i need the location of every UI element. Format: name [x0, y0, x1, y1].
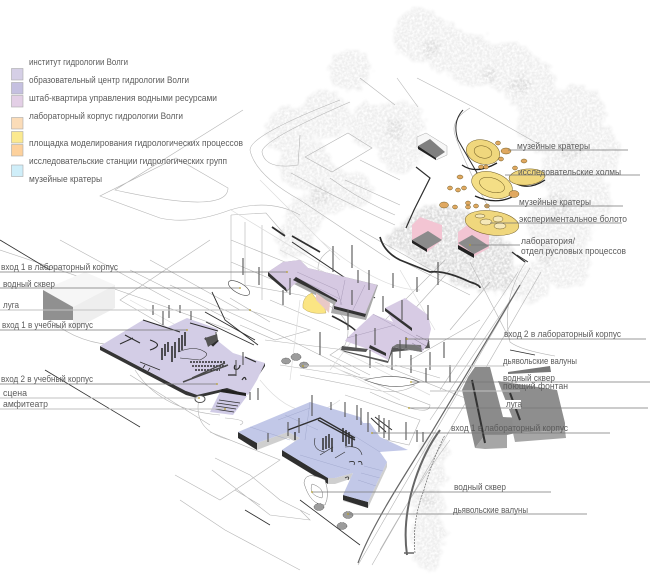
callouts right: поющий фонтан: [503, 381, 568, 391]
callouts right: вход 1 в лабораторный корпус: [451, 423, 568, 433]
leader lines: [0, 150, 650, 514]
site linework: [0, 78, 555, 570]
legend labels: музейные кратеры: [29, 174, 102, 184]
legend labels: образовательный центр гидрологии Волги: [29, 75, 189, 85]
legend labels: лабораторный корпус гидрологии Волги: [29, 111, 183, 121]
callouts right: отдел русловых процессов: [521, 246, 626, 256]
callouts right: луга: [506, 399, 522, 409]
grey tree mass behind labs: [382, 205, 515, 292]
callouts right: водный сквер: [503, 373, 555, 383]
callouts left: вход 1 в лабораторный корпус: [1, 262, 118, 272]
callouts left: [1, 262, 118, 409]
callouts right: исследовательские холмы: [518, 167, 621, 177]
callouts left: вход 2 в учебный корпус: [1, 374, 93, 384]
callouts right: лаборатория/: [521, 236, 575, 246]
callouts left: луга: [3, 300, 19, 310]
callouts right: дьявольские валуны: [503, 356, 577, 366]
legend labels: исследовательские станции гидрологических групп: [29, 156, 227, 166]
museum craters and hills: [440, 136, 546, 239]
north service block: [417, 133, 447, 160]
long curved promenade: [358, 285, 520, 563]
callouts right: вход 2 в лабораторный корпус: [504, 329, 621, 339]
callouts right: музейные кратеры: [517, 141, 590, 151]
callouts left: вход 1 в учебный корпус: [2, 320, 93, 330]
callouts right: экспериментальное болото: [519, 214, 627, 224]
callouts left: сцена: [3, 388, 27, 398]
legend labels: штаб-квартира управления водными ресурсами: [29, 93, 217, 103]
tree canopy: [266, 9, 621, 569]
legend labels: площадка моделирования гидрологических процессов: [29, 138, 243, 148]
right grey laboratory massing: [462, 366, 566, 449]
legend labels: институт гидрологии Волги: [29, 57, 128, 67]
leader dots: [186, 244, 471, 515]
callouts right: [451, 141, 627, 515]
pink laboratory cubes: [412, 217, 489, 258]
road edge heavy strokes: [0, 110, 535, 545]
vertical posts: [153, 245, 450, 442]
central courtyard structure: [120, 320, 256, 382]
callouts right: музейные кратеры: [519, 197, 591, 207]
pink building: north pavilion: [268, 260, 378, 320]
legend: [12, 57, 243, 184]
callouts right: водный сквер: [454, 482, 506, 492]
pink building: south pavilion: [341, 298, 431, 363]
callouts left: водный сквер: [3, 279, 55, 289]
callouts left: амфитеатр: [3, 399, 48, 409]
amphitheatre: [210, 389, 247, 415]
legend swatches: [12, 68, 23, 176]
left grey massing block: [43, 272, 115, 330]
small ponds and stones: [195, 278, 420, 530]
yellow modelling platform: [303, 293, 326, 313]
legend labels: [29, 57, 243, 184]
blue institute building: [238, 402, 408, 508]
violet education building: [100, 318, 265, 415]
callouts right: дьявольские валуны: [453, 505, 528, 515]
